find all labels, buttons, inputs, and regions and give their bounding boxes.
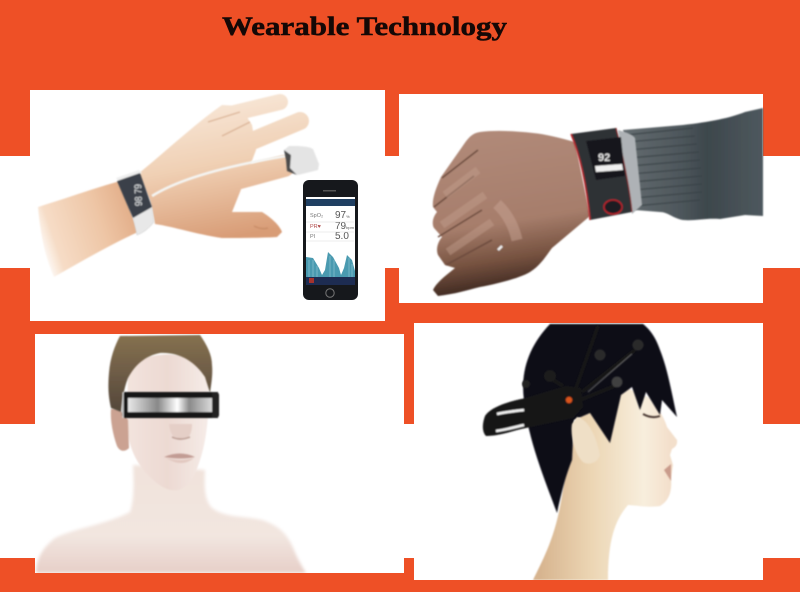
smartphone app: 5.0 [335,231,349,242]
smartphone app: PI [310,234,316,240]
smartphone app: 97% [335,210,350,221]
smartphone app: PR♥ [310,224,321,230]
smart band device [571,128,642,220]
visor glasses [122,392,219,418]
fingertip sensor [284,146,319,175]
panel: woman with EEG headset [414,323,763,580]
fist [433,131,590,296]
smart band device: 92 [598,152,610,164]
wrist band device: 98 79 [133,184,145,206]
nose and mouth [164,424,195,463]
hair [108,335,212,412]
face [127,354,209,490]
neck and face [533,385,677,580]
panel: man with visor glasses [35,334,404,573]
ear [572,417,600,464]
smartphone app: SpO₂ [310,213,323,219]
wrist band device [116,170,154,235]
ear [111,409,129,451]
eye and lips [643,414,671,481]
title: Wearable Technology [222,12,507,41]
torso and neck [36,465,306,573]
panel: wrist band with finger sensor and phone [30,90,385,321]
hair [523,324,677,513]
sweater sleeve [623,108,763,220]
smartphone app [303,180,358,300]
panel: curved smart band on wrist [399,94,763,303]
arm and hand [38,102,300,277]
sensor cable [152,156,286,196]
EEG headset [483,326,644,436]
smartphone app: 79bpm [335,221,355,232]
